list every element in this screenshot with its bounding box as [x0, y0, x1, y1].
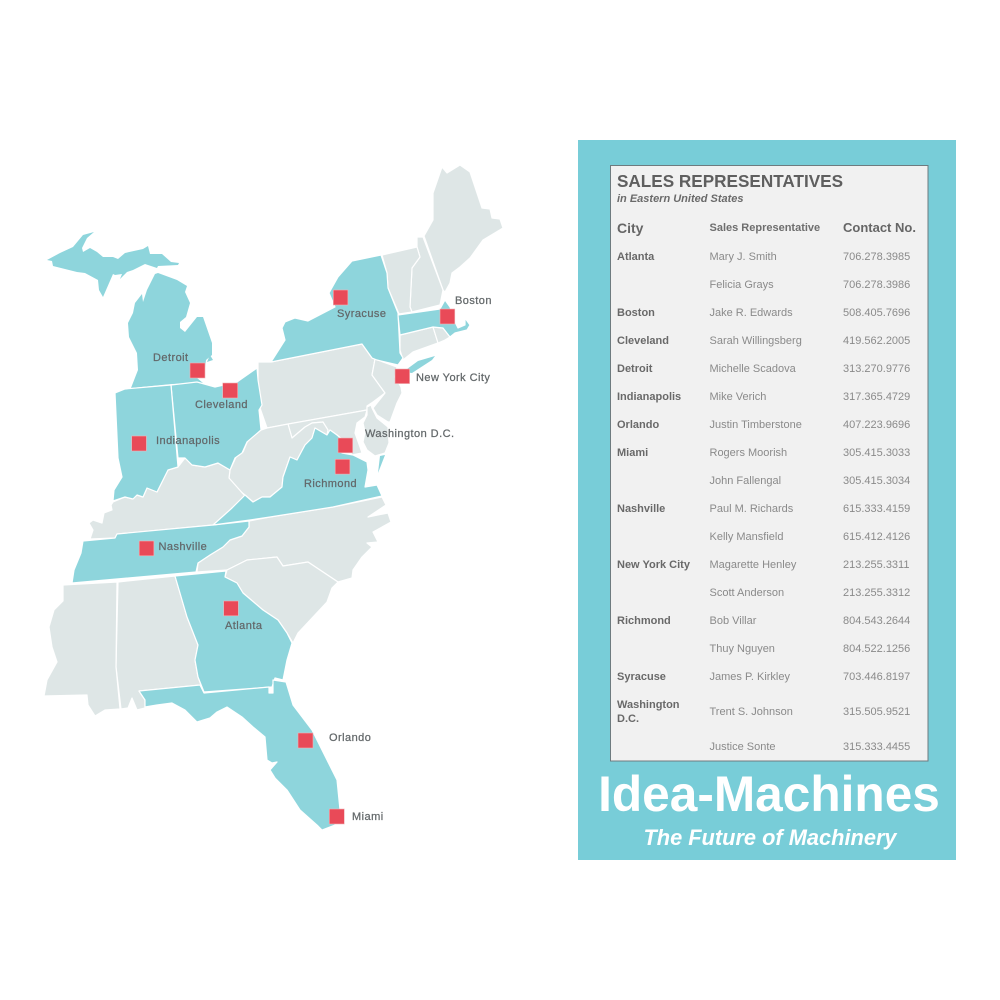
marker: Atlanta — [224, 601, 238, 616]
row: Orlando: Orlando — [617, 419, 659, 431]
row: Atlanta 2: Felicia Grays — [710, 279, 774, 291]
row: New York City 2: 213.255.3312 — [843, 587, 910, 599]
row: Richmond 1: 804.543.2644 — [843, 615, 910, 627]
label: Indianapolis: Indianapolis — [156, 435, 220, 447]
row: Cleveland: Sarah Willingsberg — [710, 335, 802, 347]
state: Michigan lower peninsula — [128, 273, 212, 388]
state: Georgia — [175, 571, 292, 692]
state: West Virginia — [229, 422, 328, 502]
state: New York — [271, 255, 403, 365]
marker: Orlando — [298, 733, 313, 748]
row: New York City 1 — [617, 559, 909, 571]
state: Pennsylvania — [258, 344, 385, 428]
row: Nashville 1: 615.333.4159 — [843, 503, 910, 515]
marker: Washington D.C. — [338, 438, 353, 453]
column header: contact number: Contact No. — [843, 220, 916, 235]
row: Nashville 2 — [710, 531, 910, 543]
state: Maryland — [288, 410, 367, 455]
brand name: Idea-Machines — [598, 766, 940, 822]
row: Atlanta 1 — [617, 251, 910, 263]
table card — [610, 166, 928, 761]
tagline: The Future of Machinery — [643, 825, 898, 850]
column header: sales representative: Sales Representative — [710, 222, 820, 234]
row: Boston: 508.405.7696 — [843, 307, 910, 319]
row: Miami 2: John Fallengal — [710, 475, 781, 487]
row: Atlanta 1: Atlanta — [617, 251, 655, 263]
state: New Hampshire — [410, 237, 443, 312]
row: Syracuse — [617, 671, 910, 683]
row: Richmond 1: Richmond — [617, 615, 671, 627]
row: Nashville 1: Nashville — [617, 503, 665, 515]
state: Virginia eastern shore — [378, 455, 385, 473]
state: New Jersey — [372, 359, 402, 422]
row: Richmond 2: Thuy Nguyen — [710, 643, 775, 655]
state: Long Island — [403, 356, 435, 373]
state: Vermont — [382, 247, 420, 314]
row: Cleveland: Cleveland — [617, 335, 669, 347]
row: Washington D.C. 1: Washington — [617, 699, 680, 711]
label: Richmond: Richmond — [304, 478, 357, 490]
marker: Miami — [329, 809, 344, 824]
row: New York City 2: Scott Anderson — [710, 587, 784, 599]
row: Boston: Jake R. Edwards — [710, 307, 793, 319]
marker: New York City — [395, 369, 410, 384]
state: Kentucky — [89, 458, 245, 539]
label: Nashville: Nashville — [158, 541, 207, 553]
row: Indianapolis: Indianapolis — [617, 391, 681, 403]
row: Miami 2: 305.415.3034 — [843, 475, 910, 487]
label: Cleveland: Cleveland — [195, 399, 248, 411]
table subtitle: in Eastern United States — [617, 193, 744, 205]
marker: Cleveland — [223, 383, 238, 398]
row: Miami 2 — [710, 475, 910, 487]
row: Miami 1: Rogers Moorish — [710, 447, 787, 459]
row: Nashville 2: Kelly Mansfield — [710, 531, 783, 543]
marker: Detroit — [190, 363, 205, 378]
row: New York City 2 — [710, 587, 910, 599]
row: Richmond 1 — [617, 615, 910, 627]
row: Cleveland — [617, 335, 910, 347]
row: Washington D.C. 1 — [617, 699, 910, 725]
row: Atlanta 1: Mary J. Smith — [710, 251, 777, 263]
panel: sales representatives — [578, 140, 956, 860]
row: New York City 1: Magarette Henley — [710, 559, 797, 571]
row: Miami 1: 305.415.3033 — [843, 447, 910, 459]
state: Michigan island — [207, 355, 213, 362]
row: Orlando: Justin Timberstone — [710, 419, 802, 431]
label: Atlanta: Atlanta — [225, 620, 263, 632]
label: Detroit: Detroit — [153, 352, 189, 364]
state: Ohio — [171, 368, 262, 470]
label: Boston: Boston — [455, 295, 492, 307]
row: Miami 1: Miami — [617, 447, 648, 459]
column header: city: City — [617, 220, 644, 236]
row: Washington D.C. 1: D.C. — [617, 713, 639, 725]
row: Boston: Boston — [617, 307, 655, 319]
label: Miami: Miami — [352, 811, 384, 823]
row: Syracuse: James P. Kirkley — [710, 671, 790, 683]
row: Washington D.C. 1: 315.505.9521 — [843, 706, 910, 718]
state: Florida — [139, 680, 340, 830]
row: Washington D.C. 2: 315.333.4455 — [843, 741, 910, 753]
row: Miami 1 — [617, 447, 910, 459]
state: Indiana — [113, 385, 178, 501]
row: Richmond 1: Bob Villar — [710, 615, 757, 627]
label: New York City: New York City — [416, 372, 490, 384]
state: Delaware and Delmarva — [363, 405, 389, 456]
map: eastern United States — [44, 165, 503, 830]
row: Nashville 2: 615.412.4126 — [843, 531, 910, 543]
state: Maine — [424, 165, 503, 292]
panel background — [578, 140, 956, 860]
row: Richmond 2 — [710, 643, 910, 655]
row: Syracuse: Syracuse — [617, 671, 666, 683]
label: Orlando: Orlando — [329, 732, 371, 744]
row: Boston — [617, 307, 910, 319]
state: North Carolina — [197, 497, 391, 582]
row: Cleveland: 419.562.2005 — [843, 335, 910, 347]
state: Connecticut — [400, 327, 438, 360]
row: Indianapolis: Mike Verich — [710, 391, 766, 403]
row: Orlando — [617, 419, 910, 431]
label: Washington D.C.: Washington D.C. — [365, 428, 454, 440]
label: Syracuse: Syracuse — [337, 308, 386, 320]
marker: Syracuse — [333, 290, 348, 305]
row: Atlanta 1: 706.278.3985 — [843, 251, 910, 263]
state: Virginia — [213, 428, 382, 525]
row: Atlanta 2: 706.278.3986 — [843, 279, 910, 291]
row: Nashville 1: Paul M. Richards — [710, 503, 794, 515]
state: Massachusetts — [398, 300, 470, 337]
row: New York City 1: New York City — [617, 559, 691, 571]
state: Michigan upper peninsula — [47, 232, 179, 297]
row: New York City 1: 213.255.3311 — [843, 559, 909, 571]
marker: Indianapolis — [132, 436, 146, 451]
row: Orlando: 407.223.9696 — [843, 419, 910, 431]
row: Washington D.C. 2 — [710, 741, 910, 753]
row: Syracuse: 703.446.8197 — [843, 671, 910, 683]
state: Mississippi — [44, 582, 120, 716]
row: Detroit: Michelle Scadova — [710, 363, 797, 375]
row: Nashville 1 — [617, 503, 910, 515]
row: Atlanta 2 — [710, 279, 910, 291]
row: Washington D.C. 2: Justice Sonte — [710, 741, 776, 753]
row: Detroit — [617, 363, 910, 375]
state: South Carolina — [225, 557, 338, 643]
row: Detroit: 313.270.9776 — [843, 363, 910, 375]
row: Detroit: Detroit — [617, 363, 653, 375]
state: Tennessee — [72, 521, 249, 583]
row: Indianapolis: 317.365.4729 — [843, 391, 910, 403]
row: Richmond 2: 804.522.1256 — [843, 643, 910, 655]
state: Alabama — [116, 576, 201, 710]
state: Rhode Island — [433, 327, 450, 343]
table title: SALES REPRESENTATIVES — [617, 171, 843, 191]
marker: Richmond — [335, 459, 350, 474]
row: Indianapolis — [617, 391, 910, 403]
marker: Boston — [440, 309, 455, 324]
marker: Nashville — [139, 541, 154, 556]
row: Washington D.C. 1: Trent S. Johnson — [710, 706, 793, 718]
